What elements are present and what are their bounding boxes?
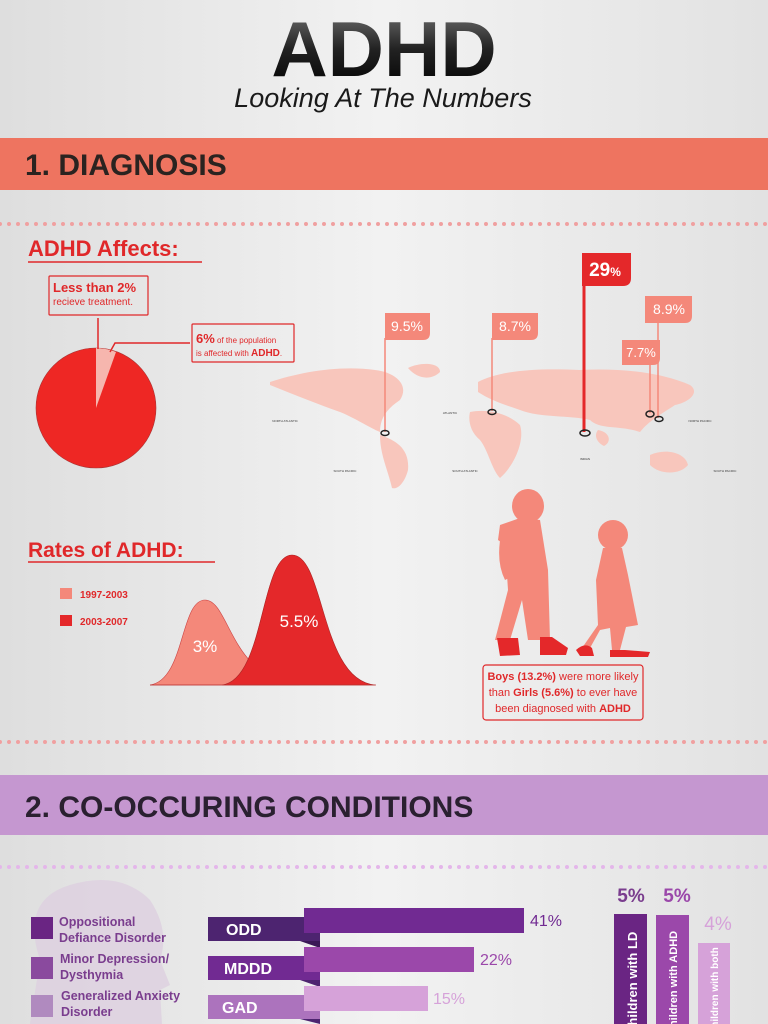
decorative head silhouette [30, 880, 170, 1024]
flag: 29% [580, 253, 631, 436]
heading: ADHD Affects: ADHD Affects: [28, 236, 179, 261]
column chart: LD / ADHD / both: 4% [704, 914, 732, 935]
bar chart: conditions: 41% [530, 913, 562, 930]
bar chart: conditions [208, 908, 562, 1024]
map ocean labels: SOUTH PACIFIC [714, 469, 737, 473]
callout: 6% [192, 324, 294, 362]
callout: boys vs girls: than Girls (5.6%) to ever have [489, 687, 637, 699]
column chart: LD / ADHD / both: 5% [617, 886, 645, 907]
header band: co-occuring conditions [0, 775, 768, 835]
legend: conditions [31, 915, 180, 1019]
map ocean labels [272, 411, 737, 473]
legend: conditions: Defiance Disorder [59, 931, 166, 945]
callout: less than 2% [49, 276, 148, 315]
header band: diagnosis: 1. DIAGNOSIS [25, 149, 227, 182]
subtitle: Looking At The Numbers [234, 83, 532, 113]
column chart: LD / ADHD / both: 5% [663, 886, 691, 907]
bar chart: conditions: ODD [226, 922, 262, 939]
column chart: LD / ADHD / both [614, 886, 732, 1024]
flag: 7.7%: 7.7% [626, 345, 656, 360]
bar chart: conditions: MDDD [224, 961, 272, 978]
map ocean labels: NORTH PACIFIC [688, 419, 712, 423]
callout: less than 2%: recieve treatment. [53, 297, 133, 308]
world map [270, 364, 694, 488]
bell curve chart [150, 555, 376, 685]
map ocean labels: ATLANTIC [443, 411, 458, 415]
illustration: boy and girl [495, 489, 650, 657]
map ocean labels: INDIAN [580, 457, 590, 461]
map ocean labels: SOUTH ATLANTIC [452, 469, 479, 473]
callout: boys vs girls [483, 665, 643, 720]
flag: 8.7%: 8.7% [499, 318, 531, 334]
legend: 2003-2007 [80, 617, 128, 628]
bell curve chart: 5.5% [280, 612, 318, 631]
callout: less than 2%: Less than 2% [53, 280, 137, 295]
legend: conditions: Oppositional [59, 915, 135, 929]
header band: diagnosis [0, 138, 768, 190]
legend [60, 588, 128, 628]
map ocean labels: SOUTH PACIFIC [334, 469, 357, 473]
map ocean labels: NORTH ATLANTIC [272, 419, 299, 423]
flag: 8.9%: 8.9% [653, 301, 685, 317]
legend: conditions: Disorder [61, 1005, 113, 1019]
legend: conditions: Dysthymia [60, 968, 124, 982]
pie chart [36, 318, 190, 468]
bar chart: conditions: GAD [222, 1000, 258, 1017]
legend: conditions: Minor Depression/ [60, 952, 170, 966]
legend: conditions: Generalized Anxiety [61, 989, 180, 1003]
bell curve chart: 3% [193, 637, 217, 656]
flag: 9.5%: 9.5% [391, 318, 423, 334]
flag: 29%: 29% [589, 260, 621, 281]
heading: Rates of ADHD: Rates of ADHD: [28, 539, 184, 562]
callout: 6%: is affected with ADHD. [196, 348, 282, 359]
bar chart: conditions: 15% [433, 991, 465, 1008]
callout: boys vs girls: Boys (13.2%) were more likely [487, 671, 639, 683]
title: ADHD [271, 5, 497, 93]
header band: co-occuring conditions: 2. CO-OCCURING CONDITIONS [25, 791, 473, 824]
flag: 8.9% [645, 296, 692, 422]
bar chart: conditions: 22% [480, 952, 512, 969]
flag: 9.5% [381, 313, 430, 436]
callout: 6%: 6% of the population [196, 331, 276, 346]
flag: 7.7% [622, 340, 660, 417]
callout: boys vs girls: been diagnosed with ADHD [495, 703, 631, 715]
legend: 1997-2003 [80, 590, 128, 601]
flag: 8.7% [488, 313, 538, 414]
